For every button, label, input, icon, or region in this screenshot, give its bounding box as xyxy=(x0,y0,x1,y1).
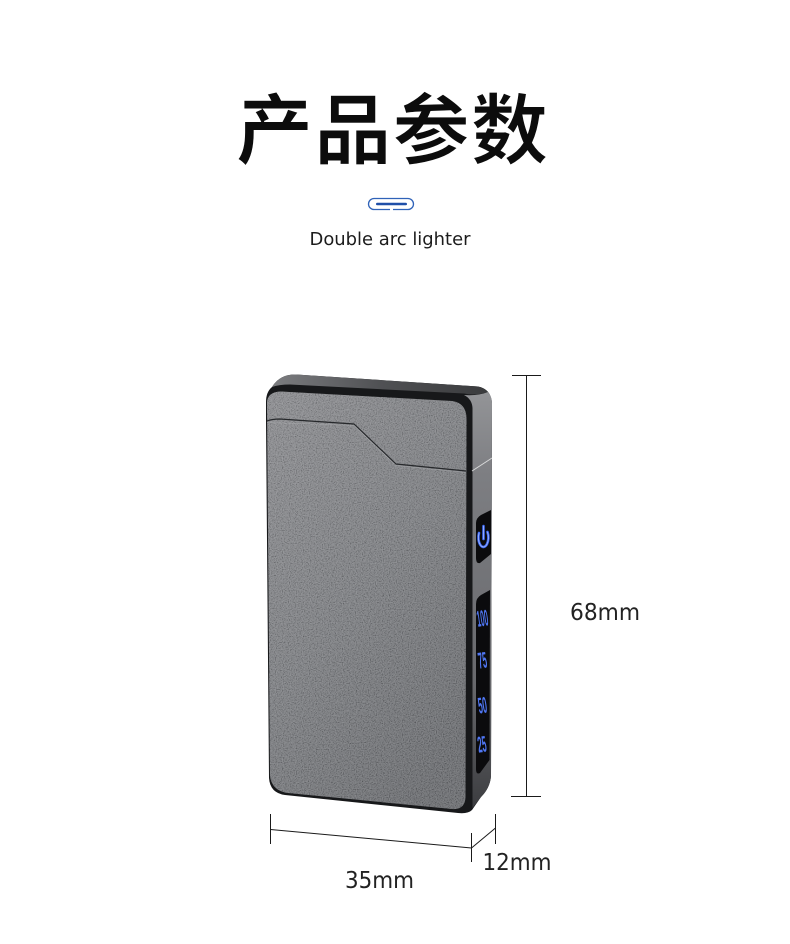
lighter body silhouette xyxy=(266,374,492,813)
battery level labels: 25 xyxy=(476,732,488,758)
width label: 35mm xyxy=(345,868,414,894)
face grain texture xyxy=(262,385,472,815)
battery level labels: 100 xyxy=(475,605,490,632)
battery level labels: 50 xyxy=(476,693,489,719)
front face: lid and case xyxy=(267,392,466,809)
icon: blue pill divider xyxy=(368,198,414,211)
width and depth dimension lines xyxy=(270,814,496,862)
depth label: 12mm xyxy=(482,850,552,876)
battery level labels xyxy=(475,605,490,758)
lid seam line xyxy=(267,419,466,471)
subtitle: Double arc lighter xyxy=(310,229,471,250)
height label: 68mm xyxy=(570,600,640,626)
battery level labels: 75 xyxy=(476,648,489,674)
top edge bevel xyxy=(272,374,488,394)
title: 产品参数 xyxy=(236,70,548,181)
height dimension line xyxy=(511,376,541,796)
side seam line xyxy=(472,458,492,471)
lighter product illustration xyxy=(262,374,492,815)
right side panel xyxy=(464,392,492,808)
icon: power symbol xyxy=(478,526,488,547)
battery level window xyxy=(476,590,490,774)
power button window xyxy=(476,510,491,563)
product parameters infographic xyxy=(238,92,638,888)
